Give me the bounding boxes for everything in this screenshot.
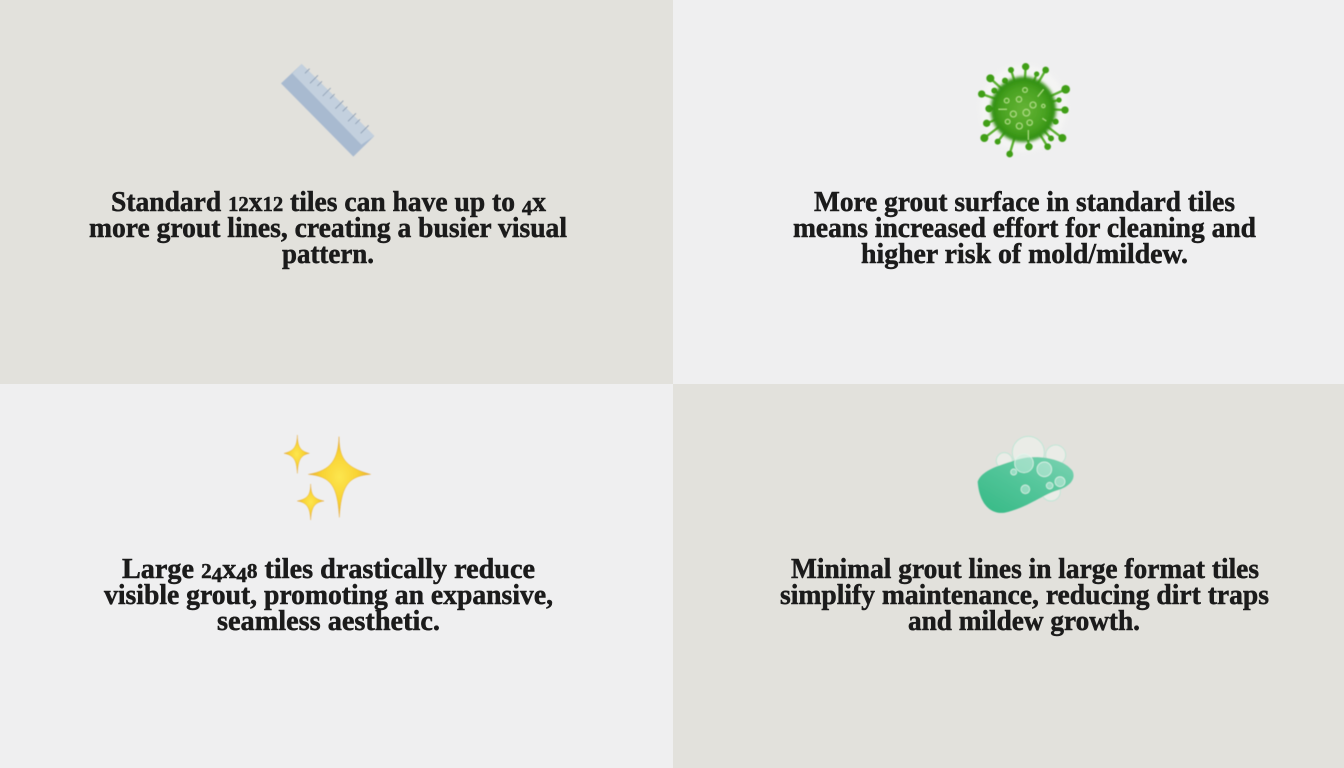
- panel: standard tile grout lines: [0, 0, 673, 384]
- icon: yellow sparkles: [284, 435, 371, 520]
- text: standard tile statement: x: [532, 187, 546, 218]
- text: large tile statement: Large 2: [122, 554, 212, 585]
- icon: ruler: [281, 64, 374, 157]
- text: large tile statement: 4: [212, 563, 223, 587]
- text: large tile statement: x: [222, 554, 236, 585]
- text: standard tile statement: [89, 187, 567, 270]
- text: maintenance statement: simplify maintenance, reducing dirt traps: [780, 580, 1269, 611]
- text: standard tile statement: pattern.: [282, 239, 374, 270]
- panel: large tile easy maintenance: [673, 384, 1344, 768]
- panel: standard tile cleaning risk: [673, 0, 1344, 384]
- text: standard tile statement: 4: [522, 196, 533, 220]
- icon: green soap with bubbles: [978, 436, 1074, 513]
- text: maintenance statement: and mildew growth.: [908, 606, 1140, 637]
- text: large tile statement: visible grout, promoting an expansive,: [104, 580, 553, 611]
- text: large tile statement: seamless aesthetic.: [217, 606, 440, 637]
- text: standard tile statement: more grout lines, creating a busier visual: [89, 213, 567, 244]
- text: cleaning risk statement: More grout surface in standard tiles: [814, 187, 1235, 218]
- text: standard tile statement: Standard 12x12 tiles can have up to: [111, 187, 519, 218]
- text: large tile statement: 4: [236, 563, 247, 587]
- icon: green virus: [978, 63, 1070, 157]
- panel: large tile seamless aesthetic: [0, 384, 673, 768]
- text: large tile statement: 8: [247, 559, 257, 583]
- text: large tile statement: tiles drastically reduce: [264, 554, 533, 585]
- text: cleaning risk statement: [793, 187, 1256, 270]
- text: cleaning risk statement: means increased effort for cleaning and: [793, 213, 1256, 244]
- text: large tile statement: [104, 554, 553, 637]
- text: maintenance statement: [780, 554, 1269, 637]
- text: maintenance statement: Minimal grout lines in large format tiles: [791, 554, 1259, 585]
- text: cleaning risk statement: higher risk of mold/mildew.: [861, 239, 1188, 270]
